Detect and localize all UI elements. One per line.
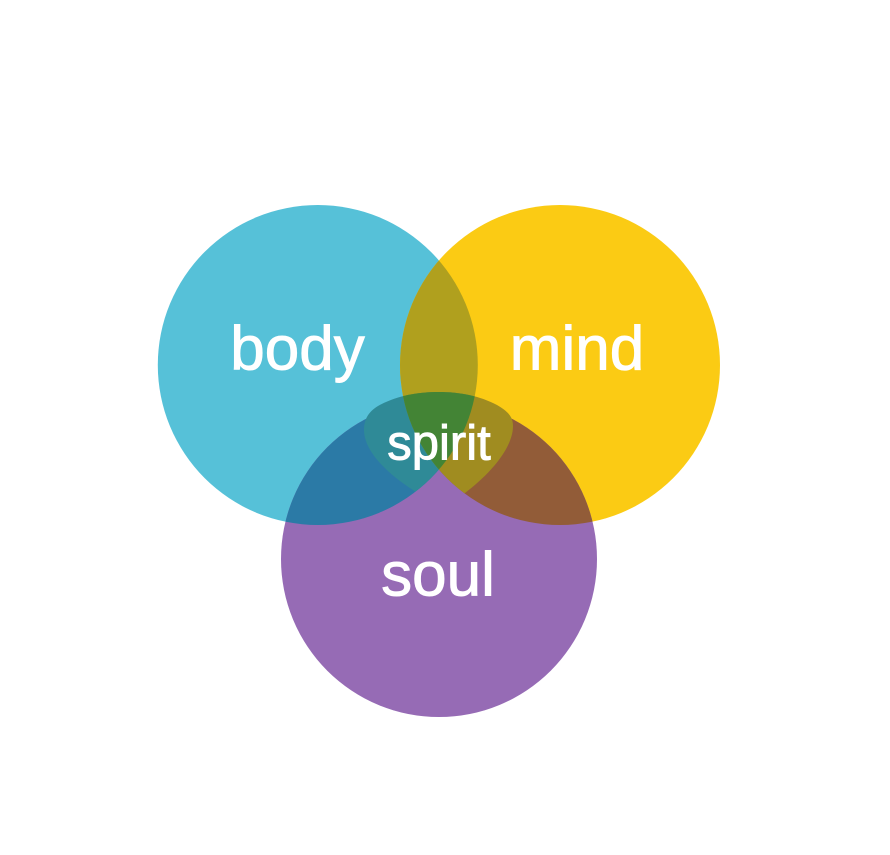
overlap: body and mind [400,260,478,396]
label: soul: soul [381,540,495,610]
spirit over mind [403,392,513,494]
label: body: body [230,314,365,384]
venn diagram [158,205,720,717]
overlap: body and soul [286,418,439,525]
circle: body [158,205,478,525]
overlap: mind and soul [439,418,592,525]
spirit centre [403,392,475,470]
spirit shape [364,392,513,494]
label: spirit: spirit [387,416,491,470]
spirit over body [364,392,475,492]
circle: soul [281,401,597,717]
label: mind: mind [510,314,644,384]
circle: mind [400,205,720,525]
